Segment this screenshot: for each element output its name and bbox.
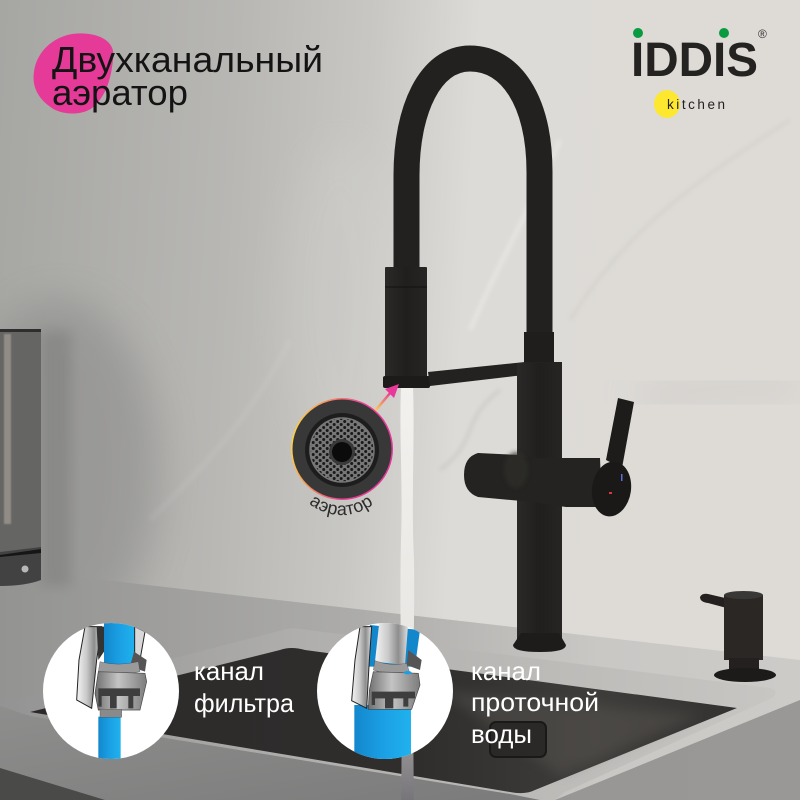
IDDIS logo: kitchen (667, 97, 725, 112)
title with pink blob (34, 33, 323, 114)
front counter edge (0, 706, 540, 800)
aerator label: аэратор (310, 497, 372, 518)
detail circle 1 (43, 623, 179, 759)
handle hub (588, 459, 635, 519)
arrow to aerator (375, 384, 399, 411)
callout: flow water channel (317, 622, 599, 762)
main body (517, 363, 562, 640)
label: канал (471, 656, 541, 686)
sink rim (0, 628, 776, 800)
sink basin (30, 648, 737, 793)
water stream (400, 386, 414, 800)
callout: filter channel (43, 620, 295, 762)
bottle on the left (0, 329, 71, 586)
cross body (464, 453, 602, 507)
detail circle 2 (317, 623, 453, 759)
IDDIS logo: ® (758, 27, 767, 41)
faucet (383, 58, 635, 652)
drain overflow plate (490, 722, 546, 757)
aerator label (310, 497, 372, 518)
heading text: Двухканальный (52, 39, 323, 80)
IDDIS logo: IDDIS (631, 34, 758, 87)
base flange (513, 633, 566, 652)
spray head (385, 267, 427, 379)
countertop (0, 568, 800, 800)
IDDIS logo (631, 27, 767, 118)
label: фильтра (194, 688, 295, 718)
label: воды (471, 719, 532, 749)
pink blob (34, 33, 113, 114)
holder arm (428, 362, 562, 386)
gooseneck tube (406, 58, 540, 345)
soap dispenser (700, 591, 776, 682)
label: канал (194, 656, 264, 686)
label: проточной (471, 687, 599, 717)
upper collar (524, 332, 554, 365)
lever handle (606, 398, 634, 468)
heading text: аэратор (52, 72, 188, 113)
aerator detail circle (291, 398, 393, 500)
